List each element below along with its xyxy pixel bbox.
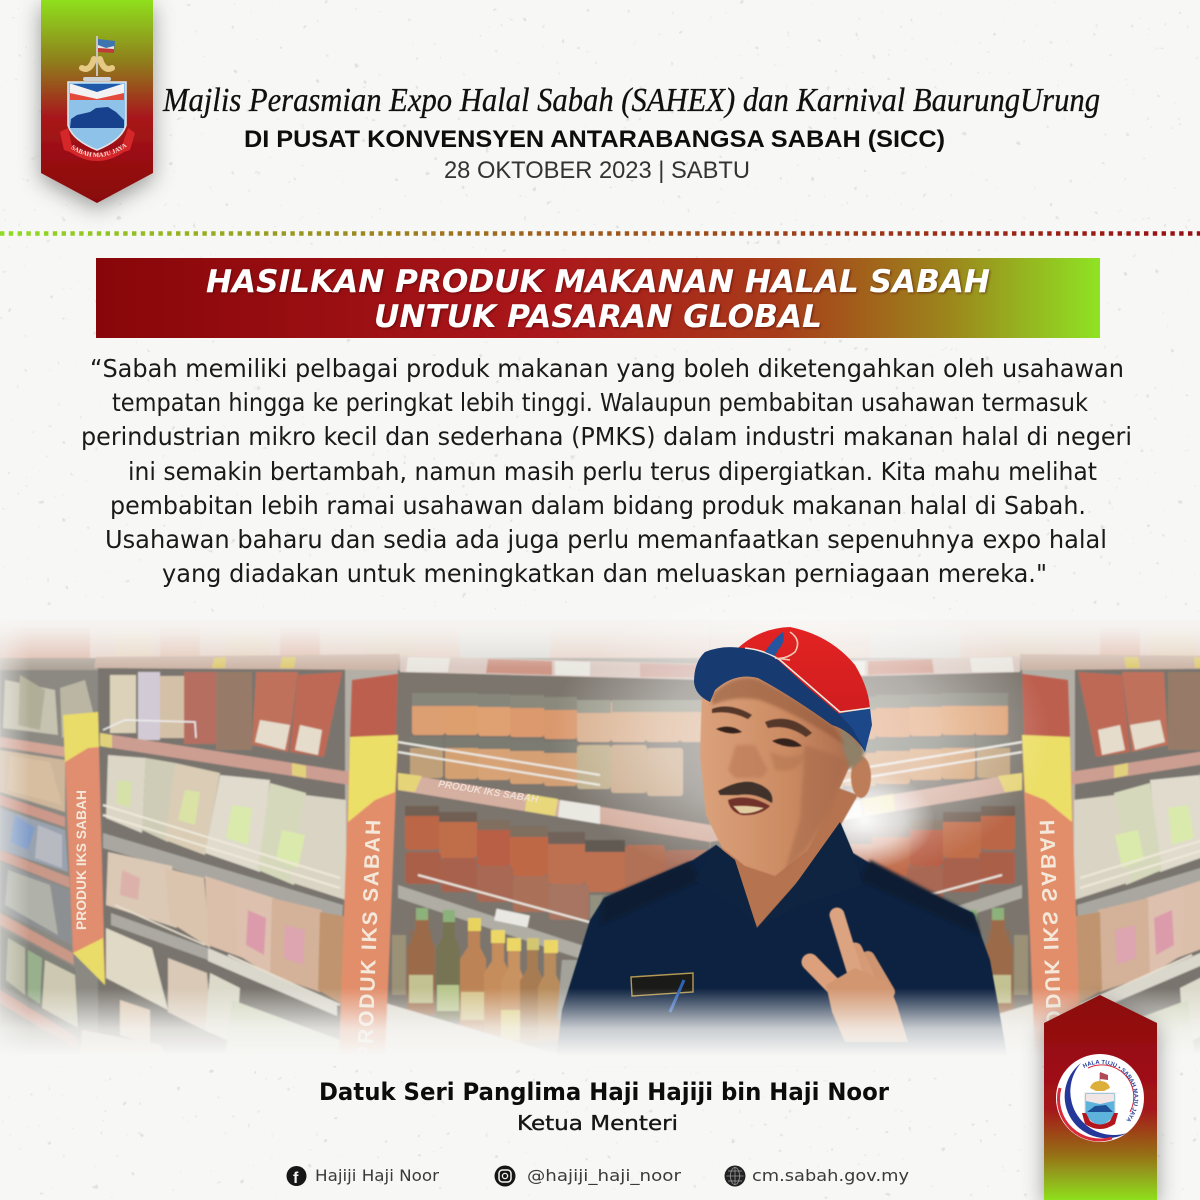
icon: Sabah coat of arms: SABAH MAJU JAYA [71, 144, 127, 158]
speaker name: Datuk Seri Panglima Haji Hajiji bin Haji Noor [319, 1078, 889, 1106]
banner text middle: PRODUK IKS SABAH [354, 820, 385, 1060]
upper jars [410, 693, 712, 796]
fades around the photo [0, 580, 1200, 1060]
rail 2 [100, 733, 350, 785]
ring line [1088, 1065, 1134, 1112]
quote text: “Sabah memiliki pelbagai produk makanan yang boleh diketengahkan oleh usahawan [90, 354, 1124, 383]
quote text [81, 354, 1132, 588]
eye bags [770, 750, 808, 771]
banner text left: PRODUK IKS SABAH [73, 790, 89, 930]
rail 2 C [398, 773, 710, 842]
headline text: HASILKAN PRODUK MAKANAN HALAL SABAH [206, 264, 990, 300]
shelf 3 grey [103, 833, 343, 920]
quote text: pembabitan lebih ramai usahawan dalam bidang produk makanan halal di Sabah. [110, 491, 1086, 520]
photo bottom fade [0, 988, 1200, 1066]
shield [68, 82, 126, 150]
headline text [206, 264, 990, 335]
section B, middle shelves [98, 660, 345, 1060]
social: instagram: @hajiji_haji_noor [527, 1166, 681, 1186]
ribbon top left with state crest [27, 0, 167, 220]
shirt [556, 822, 1008, 1060]
cap visor [694, 647, 866, 752]
quote text: Usahawan baharu dan sedia ada juga perlu memanfaatkan sepenuhnya expo halal [105, 525, 1107, 554]
shelves left half, mirrored below [0, 620, 712, 1065]
header: date: 28 OKTOBER 2023 | SABTU [444, 157, 750, 184]
headline text: UNTUK PASARAN GLOBAL [374, 299, 822, 335]
face [700, 672, 862, 876]
cap logo [765, 632, 784, 656]
rail label: PRODUK IKS SABAH [437, 779, 540, 806]
photo: supermarket shelves [0, 620, 1200, 1065]
cap blue band [836, 708, 872, 752]
moustache [718, 782, 772, 803]
ear [851, 756, 871, 798]
quote text: ini semakin bertambah, namun masih perlu terus dipergiatkan. Kita mahu melihat [128, 457, 1097, 486]
banner left [63, 712, 105, 982]
ring text: HALA TUJU • SABAH MAJU JAYA [1082, 1060, 1138, 1122]
mouth [728, 798, 770, 815]
quote text: tempatan hingga ke peringkat lebih tinggi. Walaupun pembabitan usahawan termasuk [112, 388, 1089, 417]
social: facebook: Hajiji Haji Noor [315, 1166, 439, 1185]
banner middle [339, 735, 398, 1060]
pen [670, 980, 684, 1012]
bottles [392, 908, 602, 1051]
quote text: yang diadakan untuk meningkatkan dan meluaskan perniagaan mereka." [162, 559, 1047, 588]
cap piping [745, 648, 870, 712]
crescent blue [1065, 1063, 1127, 1138]
motto ribbon [60, 128, 135, 161]
social: website [724, 1166, 909, 1186]
brows [712, 707, 812, 737]
row 1 packs [110, 675, 136, 733]
collar [695, 845, 757, 928]
lower jars [405, 806, 710, 920]
crescent red [1059, 1088, 1112, 1140]
social: website: cm.sabah.gov.my [752, 1166, 909, 1185]
arms [82, 59, 112, 69]
neck [722, 785, 858, 928]
row 2 silver packs [106, 755, 146, 833]
dotted divider [0, 231, 1200, 236]
header: event title: Majlis Perasmian Expo Halal Sabah (SAHEX) dan Karnival BaurungUrung [162, 82, 1100, 119]
hair at temple [840, 725, 865, 770]
flag [98, 39, 115, 53]
area behind person [590, 895, 710, 1065]
quote text: perindustrian mikro kecil dan sederhana (PMKS) dalam industri makanan halal di negeri [81, 422, 1132, 451]
cap crown [738, 627, 870, 716]
header: venue: DI PUSAT KONVENSYEN ANTARABANGSA SABAH (SICC) [244, 126, 945, 153]
hand [810, 915, 908, 1042]
ribbon bottom right with Hala Tuju badge [1030, 992, 1171, 1200]
headline banner [96, 258, 1100, 338]
shade under visor [712, 678, 845, 745]
nose [728, 745, 768, 778]
shelf 3 C [398, 885, 590, 962]
mirrored shelves [708, 620, 1200, 1065]
row 3 pink packs [106, 852, 177, 928]
shelf 4 grey [111, 913, 208, 960]
top box row [0, 620, 710, 658]
eyes [716, 727, 802, 747]
badge: Hala Tuju [1056, 1054, 1144, 1142]
social: instagram [494, 1166, 681, 1186]
name badge [631, 973, 693, 996]
speaker role: Ketua Menteri [517, 1111, 678, 1135]
banner text mirrored: PRODUK IKS SABAH [1035, 820, 1066, 1060]
cheek shadow [785, 745, 848, 870]
section C, jars [385, 670, 710, 1060]
row 4 [106, 928, 168, 1010]
section A, far left [0, 660, 100, 1060]
wash over photo [0, 620, 1200, 1060]
portrait: man in red cap [556, 627, 1008, 1060]
social: facebook: f [293, 1170, 299, 1187]
shoulder seams [600, 860, 980, 935]
small crest [1082, 1072, 1118, 1129]
icon: Sabah coat of arms [60, 36, 135, 161]
